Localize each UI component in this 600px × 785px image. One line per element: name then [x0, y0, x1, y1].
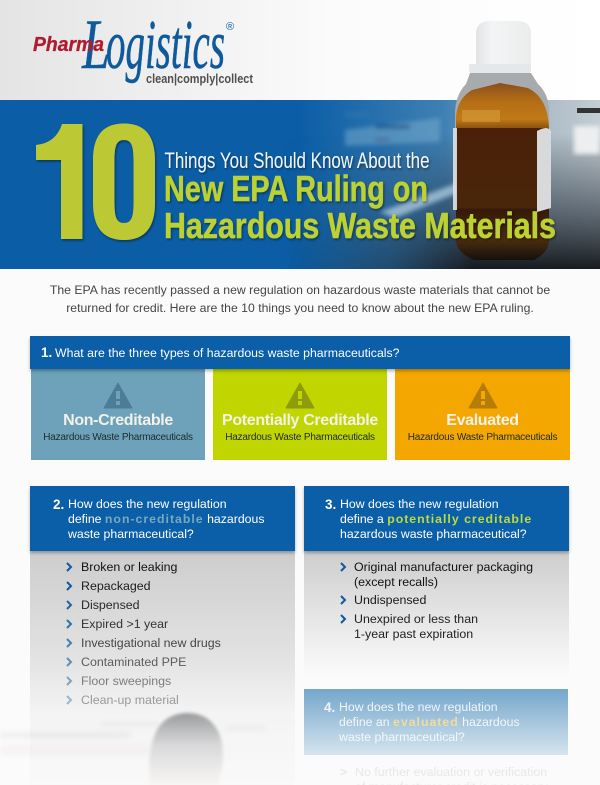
hero title: New EPA Ruling on [164, 168, 428, 209]
icon: warning triangle [104, 382, 132, 408]
logo: PharmaLogistics [33, 6, 254, 86]
section 3 list: 1-year past expiration [354, 627, 473, 641]
section 3 list: Undispensed [354, 593, 426, 607]
header background [0, 0, 214, 100]
section 3 list: Original manufacturer packaging [354, 560, 533, 574]
hero banner [0, 100, 600, 269]
hero number 10 [36, 124, 557, 246]
section 4 heading: define an evaluated hazardous [339, 715, 520, 729]
hero title [164, 148, 556, 246]
section 4 heading: How does the new regulation [339, 700, 498, 714]
section 1 panel [28, 336, 572, 373]
section 2 list: Dispensed [81, 598, 140, 612]
section 4 list [340, 765, 548, 785]
section 3 list: Unexpired or less than [354, 612, 478, 626]
section 1 heading [30, 336, 570, 369]
section 1 heading: What are the three types of hazardous waste pharmaceuticals? [55, 346, 400, 360]
section 3 panel [302, 486, 571, 641]
panel backgrounds and photo fade [3, 551, 569, 784]
section 2 list: Contaminated PPE [81, 655, 186, 669]
card: evaluated [395, 369, 570, 460]
bullet chevrons [66, 562, 72, 705]
section 3 heading: 3. [325, 497, 336, 512]
card: potentially creditable: Hazardous Waste Pharmaceuticals [225, 432, 375, 443]
intro text: The EPA has recently passed a new regulation on hazardous waste materials that cannot be [50, 283, 550, 297]
card: non-creditable [31, 369, 205, 460]
section 3 heading: How does the new regulation [340, 497, 499, 511]
section 3 list: (except recalls) [354, 575, 438, 589]
section 4 list: No further evaluation or verification [355, 765, 547, 779]
section 2 list: Broken or leaking [81, 560, 177, 574]
section 2 heading: 2. [53, 497, 64, 512]
card: non-creditable: Hazardous Waste Pharmaceuticals [43, 432, 193, 443]
medicine bottle [453, 21, 551, 260]
section 3 heading: define a potentially creditable [340, 512, 532, 526]
section 2 list: Floor sweepings [81, 674, 171, 688]
section 2 heading [30, 486, 295, 551]
logo: PharmaLogistics: L [81, 6, 110, 84]
section 3 heading [304, 486, 569, 551]
bullet chevrons [340, 562, 346, 624]
card: evaluated: Evaluated [446, 412, 519, 429]
card: potentially creditable: Potentially Creditable [222, 412, 378, 429]
section 3 heading: hazardous waste pharmaceutical? [340, 527, 527, 541]
card: potentially creditable [213, 369, 387, 460]
section 2 list [66, 560, 221, 707]
section 2 list: Clean-up material [81, 693, 179, 707]
section 4 heading [304, 689, 568, 755]
section 4 heading: 4. [324, 700, 335, 715]
icon: warning triangle [286, 382, 314, 408]
section 2 panel [28, 486, 297, 707]
section 1 heading: 1. [41, 345, 52, 360]
card: evaluated: Hazardous Waste Pharmaceuticals [408, 432, 557, 443]
section 4 panel [304, 689, 568, 785]
section 2 heading: waste pharmaceutical? [68, 527, 194, 541]
logo: PharmaLogistics: ® [226, 21, 234, 33]
intro text [50, 283, 550, 315]
section 2 heading: define non-creditable hazardous [68, 512, 264, 526]
logo: PharmaLogistics: clean|comply|collect [146, 72, 254, 86]
section 4 list: > [340, 765, 347, 779]
section 3 list [340, 560, 533, 641]
section 2 list: Expired >1 year [81, 617, 168, 631]
section 2 heading: How does the new regulation [68, 497, 227, 511]
hero title: Things You Should Know About the [164, 148, 430, 173]
card: non-creditable: Non-Creditable [63, 412, 173, 429]
intro text: returned for credit. Here are the 10 things you need to know about the new EPA ruling. [66, 301, 534, 315]
section 4 heading: waste pharmaceutical? [339, 730, 465, 744]
icon: warning triangle [468, 382, 498, 408]
section 2 list: Repackaged [81, 579, 151, 593]
logo: PharmaLogistics: Pharma [33, 34, 104, 56]
section 2 list: Investigational new drugs [81, 636, 221, 650]
